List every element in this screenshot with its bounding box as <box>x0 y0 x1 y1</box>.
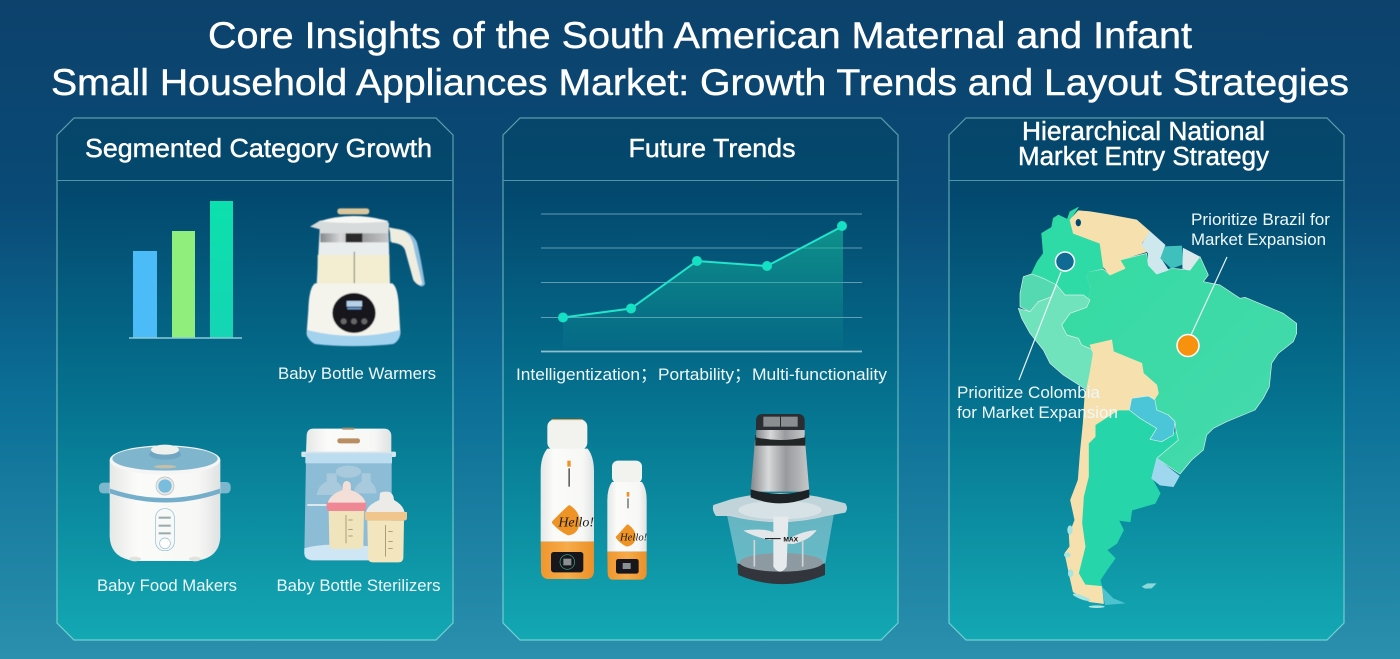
heading: Segmented Category Growth <box>85 133 432 163</box>
heading: Future Trends <box>628 133 796 163</box>
bar chart <box>129 201 242 338</box>
icon: food chopper <box>713 414 847 584</box>
Chilean islands <box>1064 525 1105 608</box>
Paraguay <box>1129 396 1175 442</box>
Brazil <box>1062 253 1297 474</box>
callout: Brazil <box>1191 210 1330 249</box>
Falkland Islands <box>1142 583 1157 589</box>
caption: trends: Multi-functionality <box>752 365 888 384</box>
panel frame <box>949 118 1344 640</box>
label: baby bottle sterilizers: Baby Bottle Sterilizers <box>276 576 440 595</box>
map of South America <box>1018 207 1297 608</box>
icon: food chopper: MAX <box>783 537 799 544</box>
icon: portable bottle warmers <box>541 419 648 580</box>
panel frame <box>503 118 898 640</box>
icon: portable bottle warmers: Hello! <box>619 533 648 544</box>
icon: portable bottle warmers: Hello! <box>557 516 594 531</box>
French Guiana <box>1183 248 1199 270</box>
caption: trends <box>516 365 888 384</box>
callout: Colombia: Prioritize Colombia <box>957 383 1101 402</box>
Uruguay <box>1152 458 1179 487</box>
panel: segmented category growth <box>57 118 453 640</box>
caption: trends: ； <box>640 365 657 384</box>
label: baby food makers: Baby Food Makers <box>97 576 237 595</box>
callout: Brazil: Market Expansion <box>1191 230 1326 249</box>
Colombia <box>1032 207 1103 307</box>
Venezuela <box>1070 211 1150 275</box>
Guyana <box>1142 232 1168 274</box>
Chile <box>1065 397 1103 603</box>
heading: Market Entry Strategy <box>1018 143 1269 171</box>
caption: trends: ； <box>734 365 751 384</box>
caption: trends: Portability <box>658 365 735 384</box>
Gulf of Venezuela <box>1076 219 1081 226</box>
heading <box>1018 118 1269 171</box>
callout: Colombia: for Market Expansion <box>957 403 1118 422</box>
leader line: Brazil <box>1191 257 1227 335</box>
caption: trends: Intelligentization <box>516 365 640 384</box>
heading: Hierarchical National <box>1022 118 1265 146</box>
callout: Colombia <box>957 383 1118 422</box>
Bolivia <box>1085 340 1158 425</box>
title: Core Insights of the South American Maternal and Infant <box>208 15 1193 56</box>
panel: future trends <box>503 118 898 640</box>
Argentina <box>1078 410 1178 587</box>
panel frame <box>57 118 453 640</box>
Suriname <box>1161 246 1183 268</box>
panel: national market entry strategy <box>949 118 1344 640</box>
Peru <box>1018 285 1093 390</box>
title: Small Household Appliances Market: Growth Trends and Layout Strategies <box>51 62 1349 103</box>
marker: Brazil <box>1177 334 1199 356</box>
Ecuador <box>1020 274 1057 312</box>
callout: Brazil: Prioritize Brazil for <box>1191 210 1330 229</box>
marker: Colombia <box>1056 252 1074 271</box>
label: baby bottle warmers: Baby Bottle Warmers <box>278 364 436 383</box>
leader line: Colombia <box>1019 272 1061 380</box>
icon: baby bottle warmer <box>307 208 425 346</box>
Tierra del Fuego <box>1102 587 1126 605</box>
icon: baby bottle sterilizer <box>301 428 407 562</box>
icon: baby food maker <box>99 445 231 561</box>
title <box>51 15 1349 103</box>
line chart <box>541 214 862 352</box>
